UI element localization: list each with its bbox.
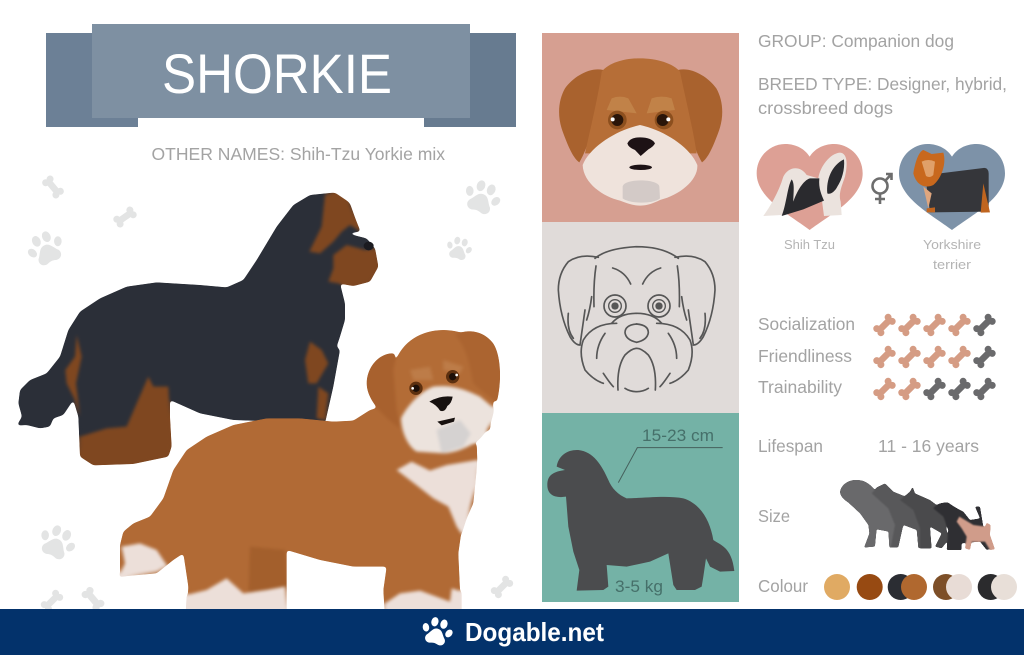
size comparison dogs — [840, 480, 995, 550]
label: Yorkshire terrier: Yorkshire — [923, 237, 981, 252]
lifespan — [758, 436, 979, 456]
label: Shih Tzu: Shih Tzu — [784, 237, 835, 252]
label: Yorkshire terrier: terrier — [933, 257, 972, 272]
rating: socialization — [758, 312, 997, 338]
rating: trainability — [758, 376, 997, 402]
title banner: SHORKIE — [162, 42, 392, 105]
rating: friendliness — [758, 344, 997, 370]
breed type text — [758, 74, 1007, 118]
footer bar — [0, 609, 1024, 655]
lifespan: Lifespan — [758, 436, 823, 456]
rating: friendliness: Friendliness — [758, 346, 852, 366]
title banner — [46, 24, 516, 127]
rating: socialization: Socialization — [758, 314, 855, 334]
icon: footer paw — [418, 614, 457, 648]
red and white dog — [118, 330, 500, 618]
footer bar: Dogable.net — [465, 617, 604, 647]
panel: colored face — [542, 33, 739, 222]
panel: silhouette with measurements: 15-23 cm — [642, 427, 714, 445]
group text: GROUP: Companion dog — [758, 31, 954, 51]
parent breed: Shih Tzu — [757, 144, 863, 230]
breed type text: BREED TYPE: Designer, hybrid, — [758, 74, 1007, 94]
breed type text: crossbreed dogs — [758, 98, 893, 118]
panel: silhouette with measurements — [542, 413, 739, 602]
colour swatches — [824, 574, 1017, 600]
background paws and bones — [21, 174, 515, 614]
panel: line art face — [542, 222, 739, 413]
icon: male female symbol — [872, 174, 892, 204]
label: Yorkshire terrier — [923, 237, 981, 272]
other names text: OTHER NAMES: Shih-Tzu Yorkie mix — [152, 144, 445, 164]
size label: Size — [758, 506, 790, 526]
rating: trainability: Trainability — [758, 377, 842, 397]
black and tan dog — [17, 193, 378, 465]
lifespan: 11 - 16 years — [878, 436, 979, 456]
colour label: Colour — [758, 576, 808, 596]
parent breed: Yorkshire terrier — [899, 144, 1005, 230]
panel: silhouette with measurements: 3-5 kg — [615, 578, 663, 596]
